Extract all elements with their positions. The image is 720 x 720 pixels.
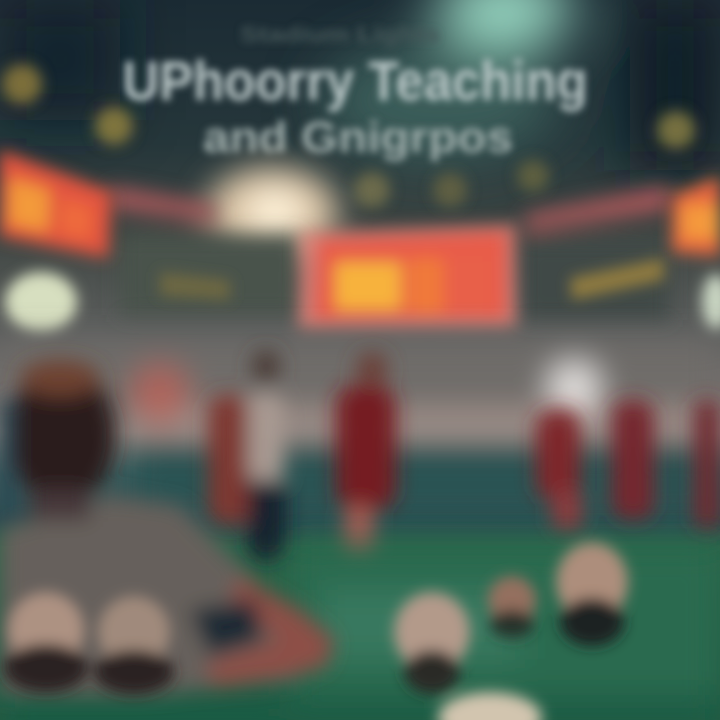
headline: and Gnigrpos bbox=[203, 113, 513, 162]
ball bbox=[556, 542, 628, 646]
left scoreboard bbox=[0, 150, 112, 258]
left edge bbox=[0, 400, 14, 520]
shirt shadow bbox=[190, 600, 262, 655]
right scoreboard bbox=[672, 176, 720, 256]
player: right bbox=[536, 400, 720, 532]
banner strip bbox=[110, 185, 670, 320]
centre scoreboard bbox=[298, 224, 516, 330]
neck bbox=[30, 490, 90, 520]
foreground person bbox=[0, 360, 335, 695]
player: left pair bbox=[208, 350, 286, 560]
ball bbox=[94, 596, 174, 694]
bokeh lights bbox=[2, 64, 695, 208]
head bbox=[8, 366, 116, 506]
headline: Stadium Lights bbox=[240, 22, 440, 47]
crowd band bbox=[0, 340, 720, 525]
ball bbox=[4, 592, 88, 692]
torso bbox=[0, 495, 300, 695]
arm bbox=[205, 575, 335, 688]
headline bbox=[122, 22, 588, 162]
headline: UPhoorry Teaching bbox=[122, 49, 588, 112]
ball bbox=[394, 592, 470, 694]
players bbox=[208, 350, 720, 565]
balls in foreground bbox=[4, 542, 628, 720]
yellow signs bbox=[160, 258, 664, 300]
central flare bbox=[206, 166, 338, 258]
pitch bbox=[0, 545, 720, 720]
player: centre bbox=[336, 352, 396, 565]
ball bbox=[488, 576, 536, 638]
round white lights bbox=[5, 272, 720, 332]
ball bbox=[438, 692, 542, 720]
spotlight glow at top bbox=[0, 0, 720, 170]
